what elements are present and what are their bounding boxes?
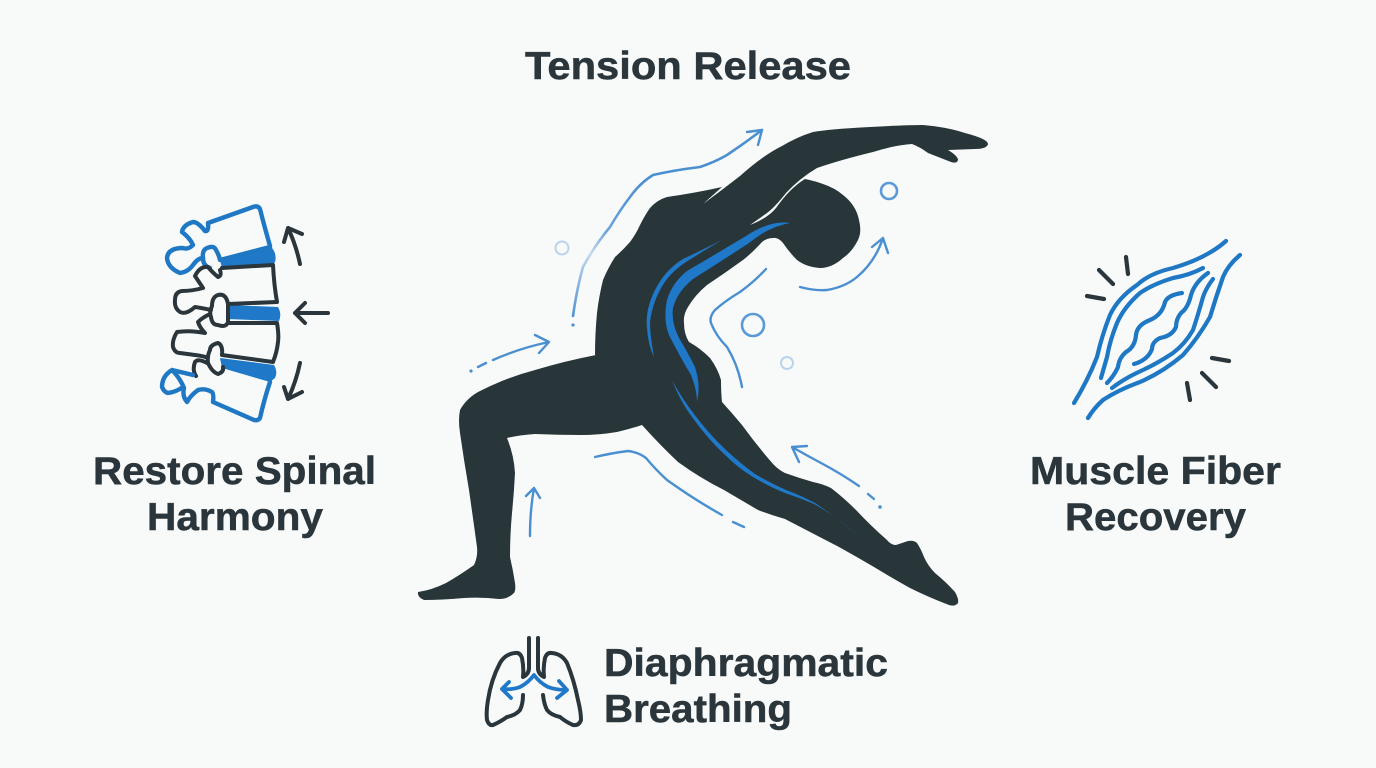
bottom vertebra: [162, 370, 270, 420]
label: Muscle Fiber Recovery: Recovery: [1065, 496, 1246, 539]
label: Muscle Fiber Recovery: Muscle Fiber: [1030, 450, 1281, 493]
disc top: [220, 248, 276, 268]
leg highlight: [672, 380, 857, 535]
circle: upper right: [881, 183, 897, 199]
motion wave: torso: [710, 269, 766, 387]
disc bottom: [220, 358, 276, 382]
circle: faint lower: [781, 357, 793, 369]
icon: lungs: [487, 638, 581, 725]
icon: spine: [162, 206, 328, 420]
middle vertebrae: [173, 265, 278, 376]
label: Muscle Fiber Recovery: [1030, 450, 1281, 539]
breathing arrows: [502, 675, 567, 698]
arrow left: [295, 303, 328, 323]
label: Restore Spinal Harmony: [93, 450, 376, 539]
motion arrow: head: [800, 238, 888, 290]
arrow down: [284, 363, 302, 399]
label: Diaphragmatic Breathing: Diaphragmatic: [604, 642, 888, 685]
motion wave: under thigh: [595, 451, 744, 527]
label: Restore Spinal Harmony: Restore Spinal: [93, 450, 376, 493]
silhouette: [418, 125, 988, 606]
label: Restore Spinal Harmony: Harmony: [147, 496, 323, 539]
circle: middle: [742, 314, 764, 336]
disc middle: [227, 305, 280, 321]
circle: faint upper left: [556, 242, 568, 254]
arrow up: [284, 228, 302, 264]
title: Tension Release: Tension Release: [525, 45, 851, 88]
motion arrow: upper left flow: [571, 130, 762, 327]
tension rays: [1087, 257, 1229, 400]
side muscle highlight: [647, 240, 722, 357]
motion arrow: back leg: [792, 446, 882, 509]
top vertebra: [167, 206, 270, 273]
figure: stretching body silhouette: [418, 125, 988, 606]
spine highlight: [665, 223, 790, 402]
label: Diaphragmatic Breathing: Breathing: [604, 688, 792, 731]
icon: muscle fibers: [1074, 241, 1240, 418]
motion arrow: front shin: [526, 488, 540, 536]
label: Diaphragmatic Breathing: [604, 642, 888, 731]
motion arrow: hip: [469, 335, 549, 373]
